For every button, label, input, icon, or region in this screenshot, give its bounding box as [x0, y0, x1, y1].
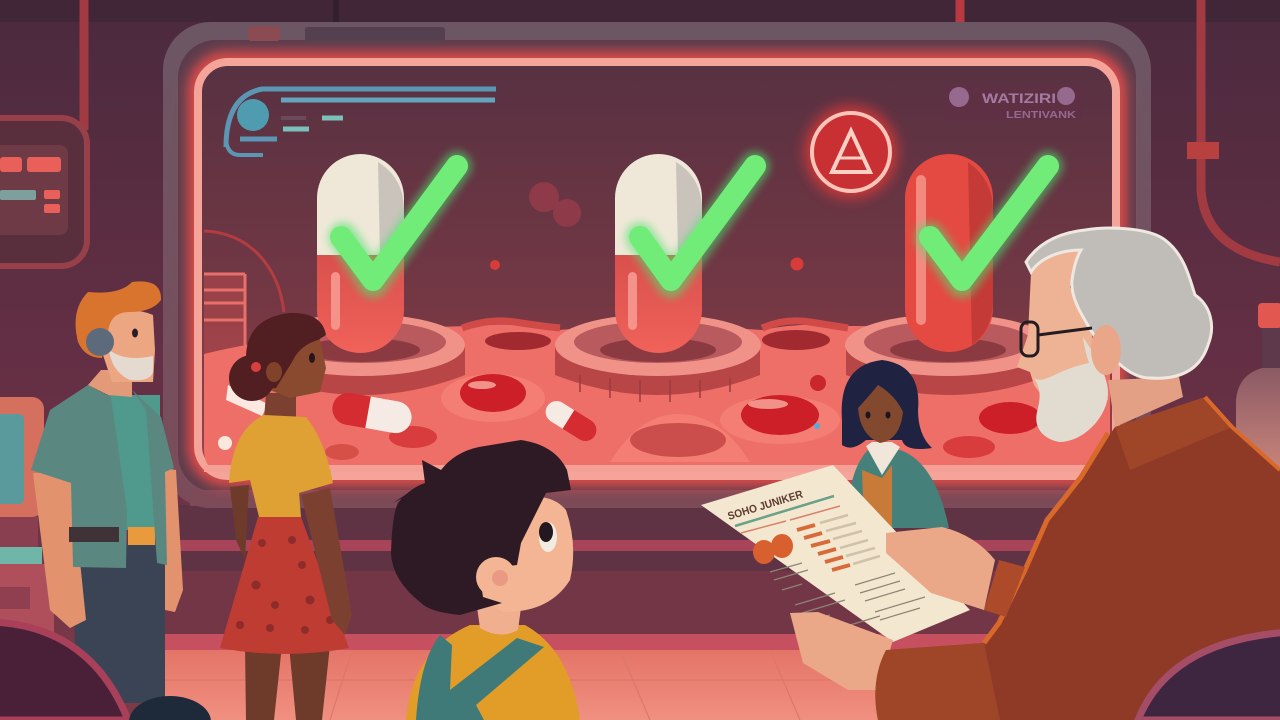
near arm [301, 488, 352, 635]
right cuff [984, 560, 1025, 617]
face [103, 310, 155, 382]
far arm [230, 485, 249, 560]
capsule pedestal 2 [555, 314, 761, 402]
floating bubbles [490, 182, 804, 270]
face [858, 385, 903, 443]
girl in yellow top [220, 313, 352, 720]
screen title badge: LENTIVANK [1006, 110, 1077, 121]
cardigan [846, 450, 949, 528]
right hand [886, 527, 995, 610]
arms [33, 468, 183, 628]
collar [1115, 397, 1232, 470]
left sleeve [875, 643, 1000, 720]
man with headset [31, 281, 183, 703]
sweater [875, 397, 1280, 720]
capsule pedestal 1 [259, 314, 465, 395]
skirt dots [236, 536, 334, 634]
check mark 1 [341, 166, 457, 283]
legs [245, 645, 330, 720]
backpack straps [416, 635, 544, 720]
warning icon [805, 106, 897, 198]
face [1017, 250, 1108, 420]
neck [264, 393, 296, 420]
hair [842, 360, 932, 449]
capsule pedestal 3 [845, 314, 1051, 395]
headset [86, 328, 114, 356]
left tube and beaker [204, 231, 284, 355]
trousers [73, 545, 165, 703]
monitor frame [163, 22, 1151, 508]
belt [128, 527, 155, 545]
girl behind [842, 360, 949, 528]
hair [1026, 228, 1212, 378]
neck [88, 370, 132, 397]
collar [866, 442, 900, 475]
screen header gauge [226, 89, 496, 155]
left hand [790, 612, 893, 690]
foreground head [129, 696, 211, 720]
face [270, 330, 326, 398]
left machine [0, 397, 54, 634]
wall pipes [84, 0, 1280, 262]
hair [246, 313, 326, 388]
neck [476, 600, 522, 635]
report paper [701, 465, 970, 642]
eye [539, 522, 557, 552]
foreground chairs [0, 622, 1280, 720]
eye [132, 328, 138, 338]
glasses [1021, 322, 1092, 356]
check mark 2 [640, 166, 755, 283]
elderly man [790, 228, 1280, 720]
capsule 3 [905, 154, 993, 352]
yellow top [229, 415, 333, 517]
check mark 3 [930, 166, 1048, 283]
boy [391, 440, 580, 720]
beard [109, 350, 153, 380]
wall control panel [0, 118, 87, 266]
capsule 2 [615, 154, 702, 353]
face [470, 497, 573, 612]
bun [229, 355, 275, 401]
vest [31, 385, 174, 568]
orange vest [862, 465, 892, 528]
neck [1108, 377, 1183, 427]
ear [1091, 325, 1121, 375]
hair [76, 281, 161, 358]
glowing screen [196, 60, 1118, 478]
hair tuft [393, 485, 430, 503]
screen title badge: WATIZIRI [982, 90, 1056, 106]
screen title badge [943, 85, 1083, 121]
ear [476, 557, 516, 597]
skirt [220, 517, 349, 654]
tee shirt [108, 395, 160, 530]
capsule 1 [317, 154, 404, 353]
loose pills on bed [226, 374, 1041, 445]
wall bottle right [1236, 303, 1280, 470]
hair [391, 440, 571, 615]
floor [160, 650, 1280, 720]
yellow shirt [406, 625, 580, 720]
red fluid bed [204, 321, 1110, 472]
sweater edge [984, 433, 1108, 643]
beard [1034, 337, 1108, 442]
report paper: SOHO JUNIKER [726, 489, 805, 523]
